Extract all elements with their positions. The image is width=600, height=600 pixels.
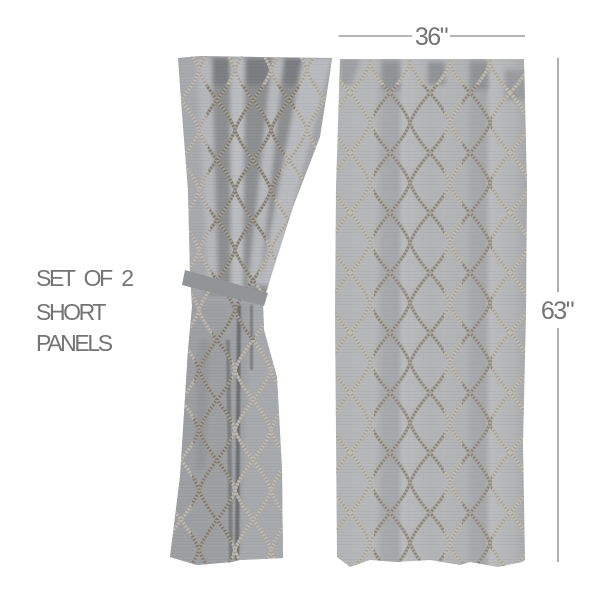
caption: set of 2 short panels: SHORT <box>36 299 106 325</box>
left curtain panel tied back <box>165 50 340 573</box>
tieback band <box>182 270 268 306</box>
upper pleat shadows <box>204 84 297 296</box>
lower folds <box>170 302 225 565</box>
caption: set of 2 short panels <box>36 265 133 356</box>
dimension: width 36 inches: 36" <box>415 23 448 51</box>
lattice <box>374 85 492 564</box>
lattice <box>190 85 300 564</box>
upper light pleats <box>178 60 208 288</box>
lower fold shadows <box>226 305 253 560</box>
dimension: height 63 inches: 63" <box>541 297 574 325</box>
caption: set of 2 short panels: PANELS <box>36 330 113 356</box>
caption: set of 2 short panels: SET OF 2 <box>36 265 133 291</box>
top pocket shadows <box>340 59 527 100</box>
right curtain panel flat <box>330 50 530 575</box>
